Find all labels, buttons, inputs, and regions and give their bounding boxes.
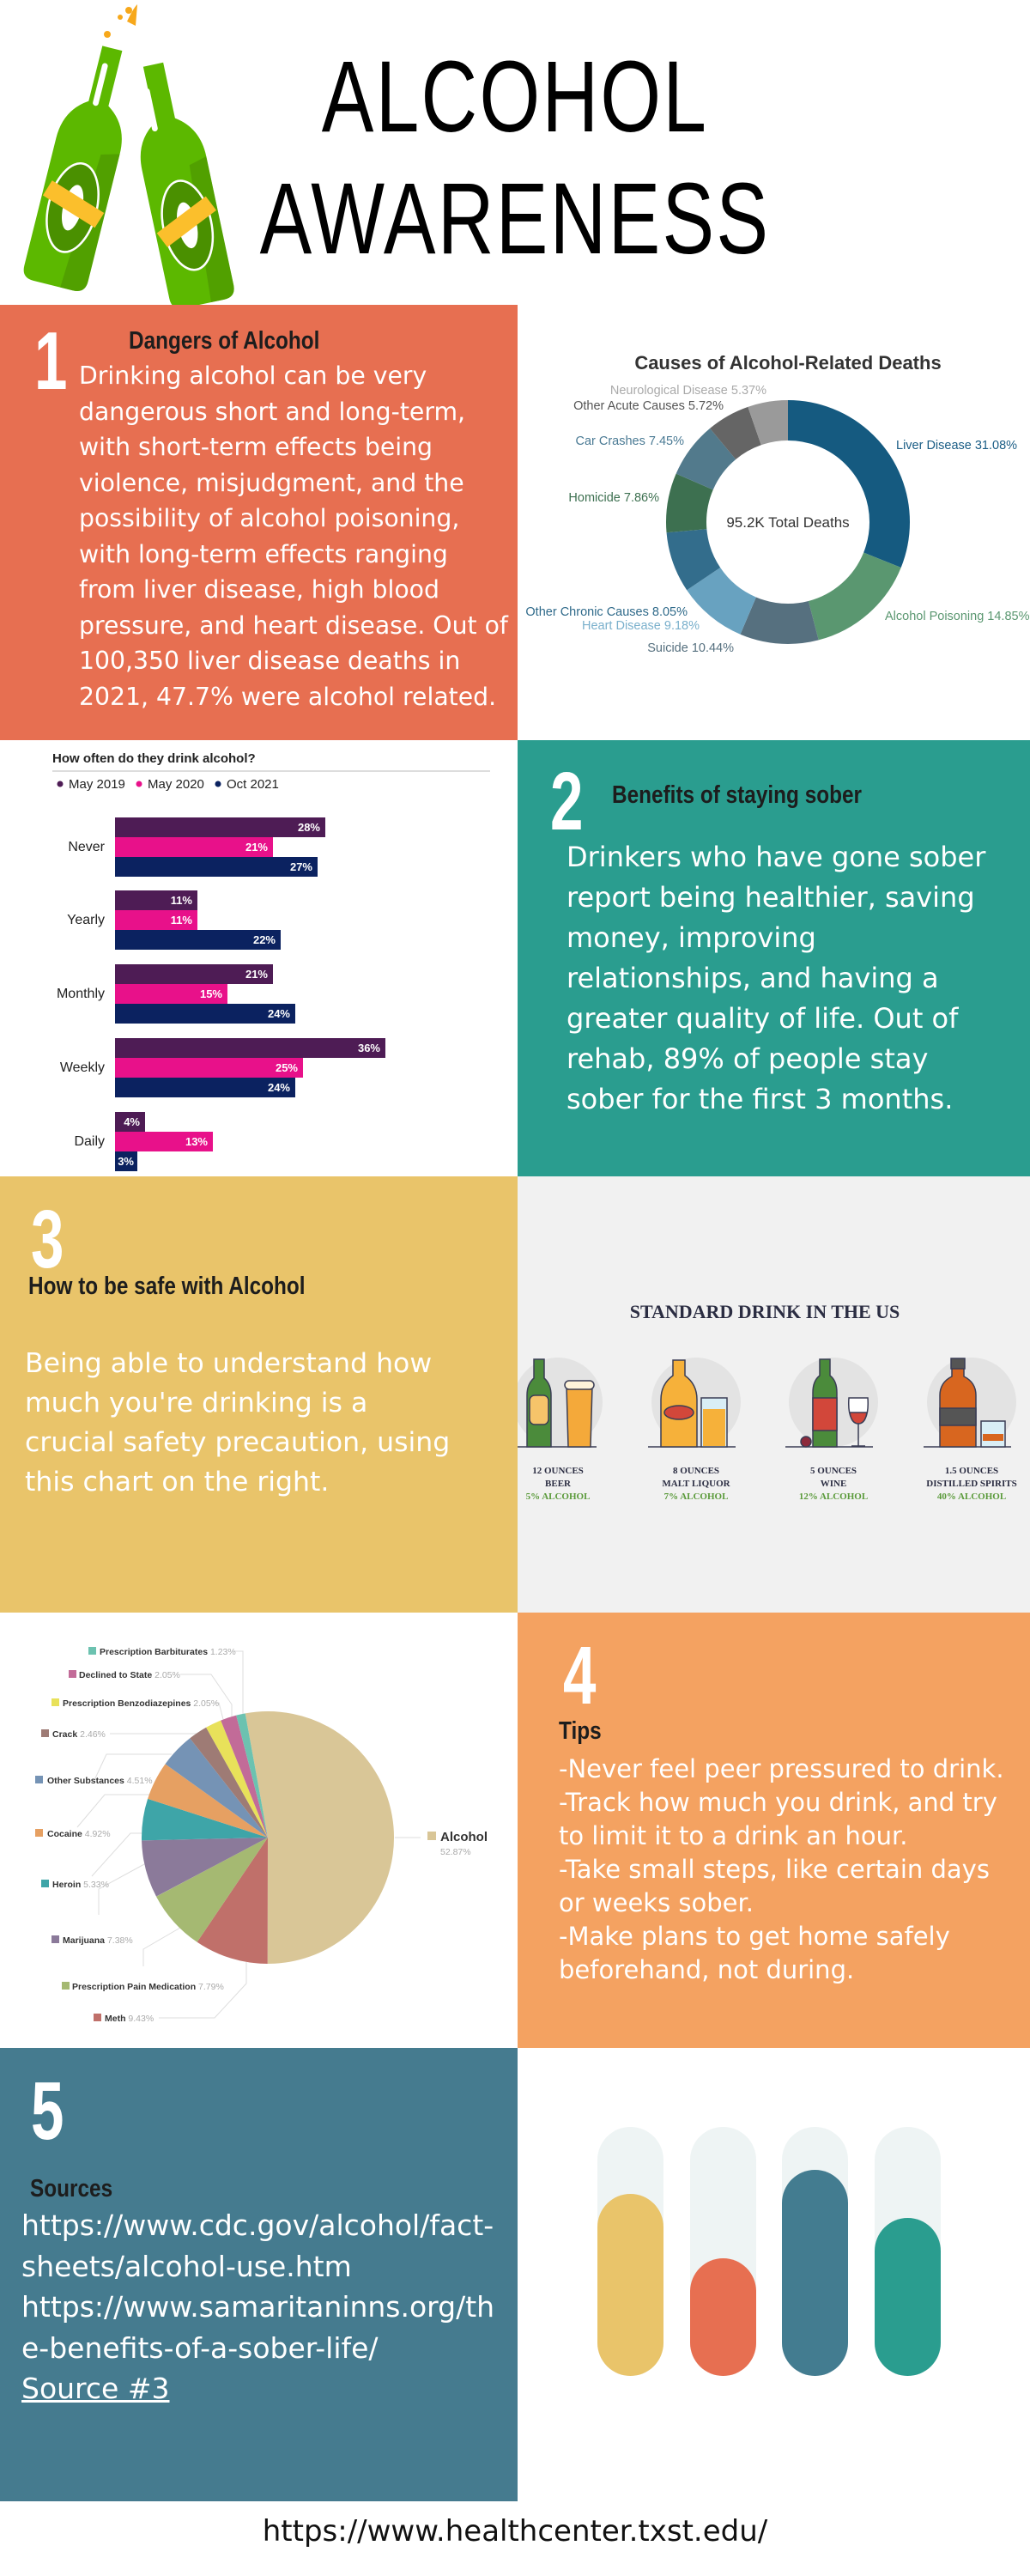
text block: tips: to limit it to a drink an hour. xyxy=(559,1821,907,1850)
chart: substance pie chart: Marijuana 7.38% xyxy=(63,1935,133,1946)
text block: safe: crucial safety precaution, using xyxy=(25,1427,450,1458)
chart: how often do they drink alcohol: 3% xyxy=(118,1155,134,1168)
donut center label: 95.2K Total Deaths xyxy=(726,514,850,531)
chart: how often do they drink alcohol: 28% xyxy=(298,821,320,834)
chart: standard drink in the US: 12 OUNCES xyxy=(532,1466,584,1476)
chart: how often do they drink alcohol xyxy=(52,751,490,1171)
chart: decorative rounded bars xyxy=(597,2127,941,2376)
text block: dangers: 2021, 47.7% were alcohol related. xyxy=(79,682,496,711)
chart: standard drink in the US: BEER xyxy=(545,1479,572,1489)
text block: dangers: violence, misjudgment, and the xyxy=(79,469,464,496)
icon: right bottle xyxy=(121,58,236,311)
chart: how often do they drink alcohol: Daily xyxy=(74,1134,105,1149)
chart: causes of alcohol-related deaths donut xyxy=(525,352,1030,655)
number 1: 1 xyxy=(34,315,67,407)
chart: standard drink in the US: MALT LIQUOR xyxy=(662,1479,731,1489)
text block: benefits: rehab, 89% of people stay xyxy=(566,1042,928,1075)
chart: substance pie chart: Cocaine 4.92% xyxy=(47,1829,111,1839)
legend: May 2020 xyxy=(148,777,204,792)
chart: standard drink in the US: 40% ALCOHOL xyxy=(937,1492,1006,1502)
heading: dangers: Dangers of Alcohol xyxy=(129,327,319,355)
chart: how often do they drink alcohol: 11% xyxy=(171,914,192,927)
chart: causes of alcohol-related deaths donut: Other Chronic Causes 8.05% xyxy=(525,605,688,619)
heading: sources: Sources xyxy=(30,2175,112,2202)
text block: dangers: possibility of alcohol poisoning, xyxy=(79,504,459,532)
chart: how often do they drink alcohol: 21% xyxy=(245,968,268,981)
panel: how to be safe with alcohol xyxy=(0,1176,518,1613)
chart title: How often do they drink alcohol? xyxy=(52,751,256,766)
chart: how often do they drink alcohol: 4% xyxy=(124,1115,140,1128)
chart: substance pie chart: Prescription Pain Medication 7.79% xyxy=(72,1982,224,1992)
text block: dangers xyxy=(79,361,508,711)
chart: causes of alcohol-related deaths donut: Neurological Disease 5.37% xyxy=(610,384,766,398)
chart: substance pie chart: 52.87% xyxy=(440,1847,471,1857)
text block: benefits: report being healthier, saving xyxy=(566,881,975,914)
text block: dangers: pressure, and heart disease. Out of xyxy=(79,611,508,639)
text block: tips: -Take small steps, like certain days xyxy=(559,1855,990,1884)
chart: standard drink in the US: DISTILLED SPIRITS xyxy=(926,1479,1017,1489)
text block: dangers: Drinking alcohol can be very xyxy=(79,361,427,390)
text block: dangers: with short-term effects being xyxy=(79,433,433,461)
panel: tips xyxy=(518,1613,1030,2048)
chart title: STANDARD DRINK IN THE US xyxy=(630,1301,900,1322)
heading: benefits: Benefits of staying sober xyxy=(612,781,862,809)
title: AWARENESS xyxy=(260,162,770,276)
chart: how often do they drink alcohol: Never xyxy=(68,840,106,854)
icon: beer xyxy=(527,1359,594,1447)
legend xyxy=(57,777,279,792)
heading: tips: Tips xyxy=(559,1717,602,1745)
number 2: 2 xyxy=(550,756,583,848)
text block: tips: beforehand, not during. xyxy=(559,1955,854,1984)
text block: safe: this chart on the right. xyxy=(25,1467,329,1498)
legend: May 2019 xyxy=(69,777,125,792)
chart: standard drink in the US: WINE xyxy=(821,1479,846,1489)
text block: dangers: with long-term effects ranging xyxy=(79,539,448,568)
chart: standard drink in the US: 5% ALCOHOL xyxy=(526,1492,590,1502)
panel: dangers of alcohol xyxy=(0,305,518,740)
chart: causes of alcohol-related deaths donut: Homicide 7.86% xyxy=(568,491,659,505)
chart: substance pie chart: Prescription Barbiturates 1.23% xyxy=(100,1647,236,1657)
chart: standard drink in the US: 8 OUNCES xyxy=(673,1466,719,1476)
chart: causes of alcohol-related deaths donut: Liver Disease 31.08% xyxy=(896,439,1017,453)
footer url: https://www.healthcenter.txst.edu/ xyxy=(263,2514,767,2549)
number 3: 3 xyxy=(31,1194,64,1285)
text block: dangers: 100,350 liver disease deaths in xyxy=(79,647,460,675)
chart: substance pie chart: Alcohol xyxy=(440,1830,488,1844)
text block: sources: e-benefits-of-a-sober-life/ xyxy=(21,2330,379,2365)
text block: sources: https://www.cdc.gov/alcohol/fact- xyxy=(21,2208,494,2242)
text block: dangers: from liver disease, high blood xyxy=(79,575,439,604)
chart: how often do they drink alcohol: 24% xyxy=(268,1007,290,1020)
chart: standard drink in the US: 7% ALCOHOL xyxy=(664,1492,728,1502)
text block: benefits: greater quality of life. Out of xyxy=(566,1002,958,1035)
number 5: 5 xyxy=(31,2065,64,2157)
panel: sources xyxy=(0,2048,518,2501)
chart: how often do they drink alcohol: 36% xyxy=(358,1042,380,1054)
text block: benefits: Drinkers who have gone sober xyxy=(566,841,985,873)
chart: substance pie chart: Declined to State 2.05% xyxy=(79,1670,180,1680)
chart: how often do they drink alcohol: Weekly xyxy=(60,1060,105,1075)
text block: sources: sheets/alcohol-use.htm xyxy=(21,2250,352,2282)
chart: how often do they drink alcohol: Monthly xyxy=(57,987,105,1001)
chart: substance pie chart: Meth 9.43% xyxy=(105,2014,154,2024)
chart: causes of alcohol-related deaths donut: Car Crashes 7.45% xyxy=(575,434,684,448)
text block: tips: -Never feel peer pressured to drink. xyxy=(559,1754,1004,1783)
text block: benefits: money, improving xyxy=(566,921,816,954)
text block: sources: Source #3 xyxy=(21,2372,169,2405)
text block: tips: or weeks sober. xyxy=(559,1888,754,1917)
text block: dangers: dangerous short and long-term, xyxy=(79,397,465,426)
chart: causes of alcohol-related deaths donut: Heart Disease 9.18% xyxy=(582,619,700,633)
title xyxy=(259,40,770,276)
chart: substance pie chart: Other Substances 4.51% xyxy=(47,1776,153,1786)
icon: distilled spirits xyxy=(940,1358,1005,1447)
header: bottles icon xyxy=(24,4,234,305)
chart: substance pie chart: Crack 2.46% xyxy=(52,1729,106,1740)
panel: benefits of staying sober xyxy=(518,740,1030,1176)
chart: how often do they drink alcohol: 25% xyxy=(276,1061,298,1074)
chart: standard drink in the US xyxy=(518,1176,1030,1613)
chart: how often do they drink alcohol: 11% xyxy=(171,894,192,907)
text block: safe xyxy=(25,1348,450,1498)
text block: benefits: sober for the first 3 months. xyxy=(566,1083,953,1115)
chart: substance pie chart xyxy=(35,1647,488,2024)
chart: how often do they drink alcohol: 15% xyxy=(200,987,222,1000)
chart: standard drink in the US: 1.5 OUNCES xyxy=(945,1466,998,1476)
chart: how often do they drink alcohol: 27% xyxy=(290,860,312,873)
chart: substance pie chart: Heroin 5.33% xyxy=(52,1880,109,1890)
chart: how often do they drink alcohol: 21% xyxy=(245,841,268,854)
chart title: Causes of Alcohol-Related Deaths xyxy=(634,352,942,374)
text block: tips: -Make plans to get home safely xyxy=(559,1922,950,1951)
number 4: 4 xyxy=(563,1630,596,1722)
chart: causes of alcohol-related deaths donut: Alcohol Poisoning 14.85% xyxy=(885,610,1030,623)
chart: standard drink in the US: 5 OUNCES xyxy=(810,1466,857,1476)
text block: sources: https://www.samaritaninns.org/th xyxy=(21,2290,494,2324)
icon: splash xyxy=(104,4,137,38)
chart: causes of alcohol-related deaths donut: Suicide 10.44% xyxy=(647,641,734,655)
chart: substance pie chart: Prescription Benzodiazepines 2.05% xyxy=(63,1698,219,1709)
text block: tips: -Track how much you drink, and try xyxy=(559,1788,997,1817)
text block: sources xyxy=(21,2208,494,2405)
icon: wine xyxy=(801,1359,868,1447)
chart: how often do they drink alcohol: 13% xyxy=(185,1135,208,1148)
text block: benefits xyxy=(566,841,985,1115)
text block: benefits: relationships, and having a xyxy=(566,962,939,994)
chart: how often do they drink alcohol: 24% xyxy=(268,1081,290,1094)
heading: safe: How to be safe with Alcohol xyxy=(28,1273,306,1300)
text block: tips xyxy=(559,1754,1004,1984)
icon: left bottle xyxy=(21,40,144,294)
chart: how often do they drink alcohol: 22% xyxy=(253,933,276,946)
title: ALCOHOL xyxy=(322,40,708,154)
legend: Oct 2021 xyxy=(227,777,279,792)
chart: causes of alcohol-related deaths donut: Other Acute Causes 5.72% xyxy=(573,399,724,413)
chart: how often do they drink alcohol: Yearly xyxy=(67,913,105,927)
text block: safe: Being able to understand how xyxy=(25,1348,432,1379)
icon: malt liquor xyxy=(661,1360,727,1447)
chart: standard drink in the US: 12% ALCOHOL xyxy=(799,1492,868,1502)
text block: safe: much you're drinking is a xyxy=(25,1388,367,1419)
